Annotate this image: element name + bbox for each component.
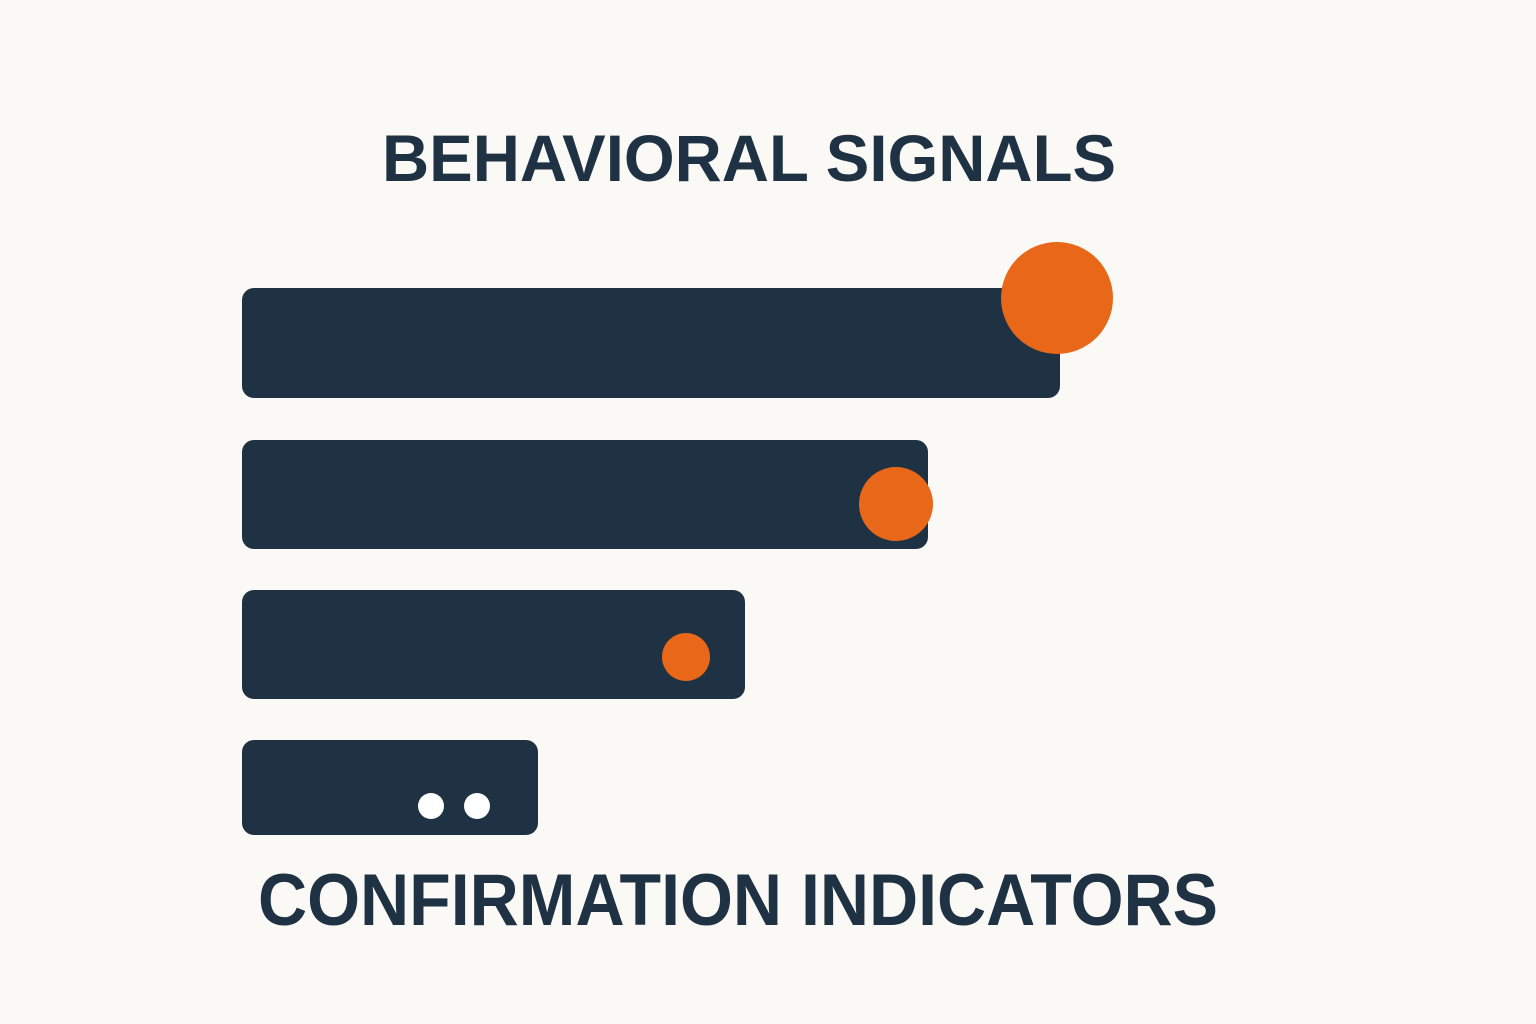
icon: small orange dot: [662, 633, 710, 681]
bar 2: [242, 440, 933, 549]
title: BEHAVIORAL SIGNALS: [382, 121, 1116, 195]
icon: white dots: [418, 793, 490, 819]
bar 3: [242, 590, 745, 699]
icon: large orange dot: [1001, 242, 1113, 354]
bar 1: [242, 242, 1113, 398]
icon: medium orange dot: [859, 467, 933, 541]
subtitle: CONFIRMATION INDICATORS: [258, 860, 1218, 941]
bar 4: [242, 740, 538, 835]
